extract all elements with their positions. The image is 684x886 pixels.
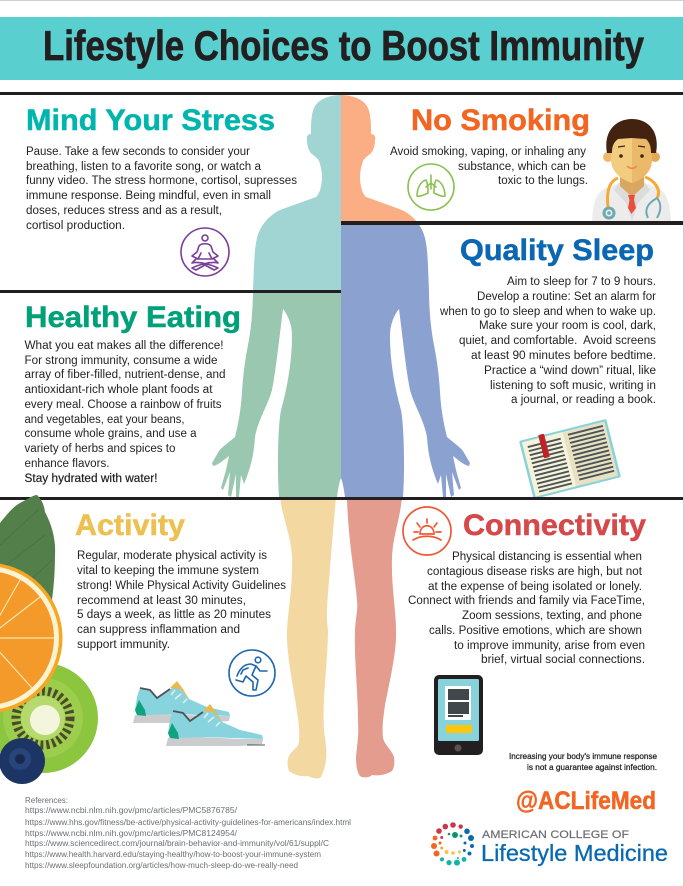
text block: activity: support immunity. — [77, 639, 170, 651]
references: https://www.sleepfoundation.org/articles/how-much-sleep-do-we-really-need — [25, 861, 298, 870]
text block: connectivity: Zoom sessions, texting, and phone — [462, 610, 642, 622]
heading: mind your stress: Mind Your Stress — [26, 104, 275, 137]
disclaimer — [509, 751, 657, 772]
text block: activity: 5 days a week, as little as 20 minutes — [77, 609, 271, 621]
illustration: fruit and leaf — [0, 495, 98, 784]
text block: eating: array of fiber-filled, nutrient-dense, and — [24, 369, 226, 381]
text block: stress — [26, 146, 297, 232]
stethoscope — [607, 177, 659, 207]
panel: connectivity — [403, 507, 646, 755]
text block: eating: For strong immunity, consume a wide — [24, 355, 218, 367]
text block: connectivity: at the expense of being isolated or lonely. — [428, 581, 642, 593]
text block: smoking — [390, 146, 588, 187]
logo: american college of lifestyle medicine — [431, 822, 668, 866]
doctor face — [611, 130, 632, 183]
text block: stress: immune response. Being mindful, even in small — [26, 190, 271, 202]
references — [25, 796, 351, 870]
references: References: — [25, 796, 68, 805]
text block: smoking: substance, which can be — [458, 161, 586, 173]
text block: eating: and vegetables, eat your beans, — [24, 414, 184, 426]
illustration: smartphone — [434, 675, 483, 755]
text block: connectivity: to improve immunity, arise from even — [454, 640, 645, 652]
references: https://www.hhs.gov/fitness/be-active/physical-activity-guidelines-for-americans/index.html — [25, 818, 351, 827]
text block: sleep: Practice a “wind down” ritual, like — [484, 365, 656, 377]
social handle: @ACLifeMed — [516, 787, 656, 815]
text block: sleep: at least 90 minutes before bedtime. — [471, 350, 656, 362]
section rules — [0, 92, 683, 500]
text block: smoking: Avoid smoking, vaping, or inhaling any — [390, 146, 586, 158]
text block: activity: vital to keeping the immune system — [77, 565, 259, 577]
text block: eating: Stay hydrated with water! — [24, 473, 158, 485]
references: https://www.sciencedirect.com/journal/brain-behavior-and-immunity/vol/61/suppl/C — [25, 839, 329, 848]
heading: activity: Activity — [75, 509, 185, 542]
text block: eating: every meal. Choose a rainbow of fruits — [24, 399, 222, 411]
text block: activity: Regular, moderate physical activity is — [77, 550, 267, 562]
text block: eating: antioxidant-rich whole plant foods at — [24, 384, 213, 396]
logo mark dots — [431, 822, 474, 866]
body: left leg yellow — [280, 497, 336, 778]
heading: no smoking: No Smoking — [411, 104, 590, 137]
doctor hair — [606, 119, 657, 153]
kiwi — [0, 663, 98, 773]
text block: eating — [24, 340, 226, 485]
illustration: back shoe — [133, 681, 230, 723]
panel: healthy eating — [24, 301, 241, 485]
text block: eating: What you eat makes all the difference! — [24, 340, 223, 352]
text block: connectivity — [408, 551, 645, 666]
text block: stress: doses, reduces stress and as a result, — [26, 205, 222, 217]
text block: connectivity: brief, virtual social connections. — [481, 654, 645, 666]
heading: healthy eating: Healthy Eating — [25, 301, 241, 334]
text block: sleep: Develop a routine: Set an alarm for — [477, 291, 656, 303]
disclaimer: Increasing your body's immune response — [509, 751, 657, 761]
text block: sleep: when to go to sleep and when to wake up. — [439, 306, 656, 318]
orange — [0, 562, 62, 714]
body: middle right blue — [341, 210, 470, 497]
text block: activity: strong! While Physical Activity Guidelines — [77, 580, 286, 592]
text block: activity: can suppress inflammation and — [77, 624, 240, 636]
logo: american college of lifestyle medicine: Lifestyle Medicine — [481, 840, 668, 866]
icon: lungs — [408, 164, 454, 210]
text block: stress: cortisol production. — [26, 220, 125, 232]
text block: sleep: Aim to sleep for 7 to 9 hours. — [507, 276, 656, 288]
text block: eating: variety of herbs and spices to — [24, 443, 176, 455]
text block: eating: consume whole grains, and use a — [24, 428, 197, 440]
icon: runner — [229, 650, 275, 696]
doctor ears — [603, 152, 613, 162]
text block: sleep: listening to soft music, writing in — [490, 380, 656, 392]
text block: connectivity: Physical distancing is essential when — [452, 551, 642, 563]
blueberry — [0, 738, 45, 784]
text block: stress: funny video. The stress hormone, cortisol, supresses — [26, 175, 297, 187]
text block: activity: recommend at least 30 minutes, — [77, 595, 246, 607]
text block: connectivity: calls. Positive emotions, which are shown — [429, 625, 642, 637]
text block: connectivity: Connect with friends and family via FaceTime, — [408, 595, 645, 607]
references: https://www.ncbi.nlm.nih.gov/pmc/articles/PMC8124954/ — [25, 829, 238, 838]
text block: activity — [77, 550, 286, 651]
text block: sleep: quiet, and comfortable. Avoid screens — [459, 335, 656, 347]
text block: sleep — [439, 276, 656, 406]
panel: no smoking — [390, 104, 671, 221]
body: middle left green — [212, 288, 341, 497]
logo text: AMERICAN COLLEGE OF — [482, 829, 629, 841]
icon: sunrise — [403, 507, 451, 555]
illustration: open book — [519, 418, 621, 499]
illustration: doctor — [592, 119, 671, 221]
text block: stress: breathing, listen to a favorite song, or watch a — [26, 161, 262, 173]
heading: quality sleep: Quality Sleep — [460, 234, 654, 267]
illustration: front shoe — [166, 704, 265, 746]
panel: activity — [75, 509, 286, 746]
text block: sleep: Make sure your room is cool, dark, — [479, 320, 656, 332]
text block: smoking: toxic to the lungs. — [498, 175, 588, 187]
disclaimer: is not a guarantee against infection. — [527, 762, 657, 772]
panel: quality sleep — [439, 234, 656, 406]
text block: eating: enhance flavors. — [24, 458, 110, 470]
text block: stress: Pause. Take a few seconds to consider your — [26, 146, 250, 158]
title banner — [0, 17, 683, 80]
body: upper right orange — [341, 95, 416, 221]
doctor coat — [592, 182, 671, 221]
leaf — [0, 495, 55, 640]
references: https://www.ncbi.nlm.nih.gov/pmc/articles/PMC5876785/ — [25, 806, 238, 815]
body: right leg red — [347, 497, 402, 777]
text block: connectivity: contagious disease risks are high, but not — [427, 566, 643, 578]
body: upper left teal — [253, 95, 341, 290]
icon: meditation — [181, 228, 229, 276]
human body silhouette — [212, 95, 470, 778]
references: https://www.health.harvard.edu/staying-healthy/how-to-boost-your-immune-system — [25, 850, 321, 859]
panel: mind your stress — [26, 104, 297, 276]
text block: sleep: a journal, or reading a book. — [511, 394, 656, 406]
heading: connectivity: Connectivity — [463, 509, 646, 542]
